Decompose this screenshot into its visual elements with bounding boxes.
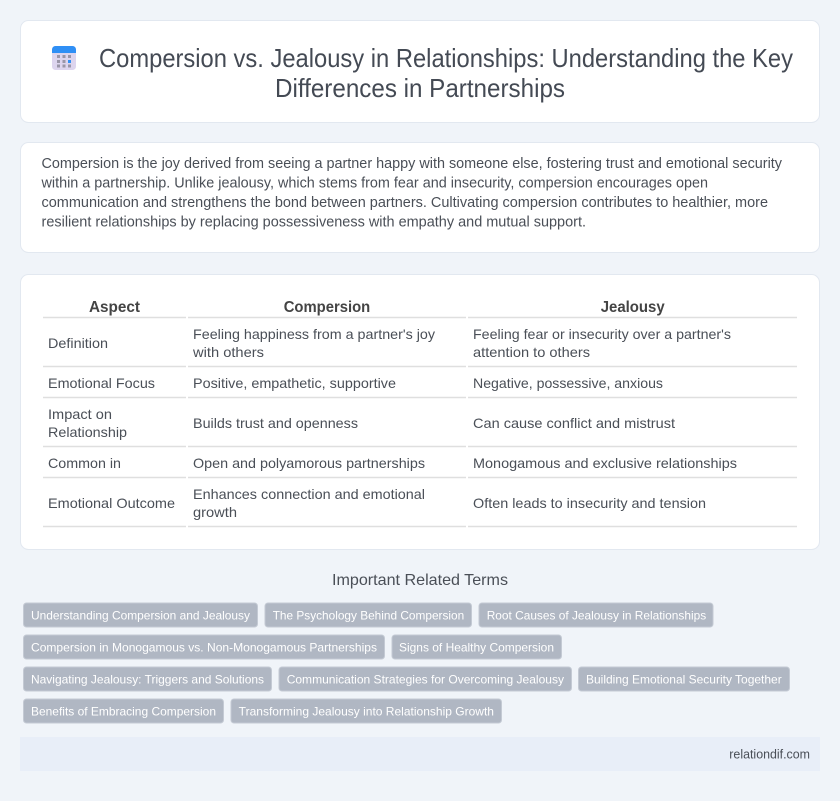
title: Compersion vs. Jealousy in Relationships: Understanding the Key — [99, 45, 793, 73]
row: definition: Feeling fear or insecurity over a partner's — [473, 326, 731, 342]
row: emotional focus: Emotional Focus — [48, 375, 155, 391]
panel: intro paragraph: Compersion is the joy derived from seeing a partner happy with someone else, fostering trust and emotional security — [42, 156, 783, 172]
row: emotional focus — [48, 375, 663, 391]
tags: related terms: Navigating Jealousy: Triggers and Solutions — [31, 672, 264, 686]
footer — [20, 737, 820, 771]
row: emotional outcome — [48, 486, 706, 520]
panel: intro paragraph: resilient relationships by replacing possessiveness with empathy and mutual support. — [42, 215, 586, 231]
tags: related terms: Benefits of Embracing Compersion — [31, 704, 216, 718]
tags: related terms: Transforming Jealousy into Relationship Growth — [239, 704, 494, 718]
row: impact on relationship: Can cause conflict and mistrust — [473, 415, 675, 431]
row: common in — [48, 455, 737, 471]
row: impact on relationship: Relationship — [48, 424, 127, 440]
tags: related terms: Communication Strategies for Overcoming Jealousy — [287, 672, 564, 686]
table header: Aspect — [89, 299, 141, 316]
tags: related terms: Understanding Compersion and Jealousy — [31, 608, 250, 622]
title — [99, 45, 793, 103]
row: emotional outcome: Enhances connection and emotional — [193, 486, 425, 502]
table header: Compersion — [284, 299, 370, 316]
tags: related terms: The Psychology Behind Compersion — [273, 608, 464, 622]
row: emotional outcome: Emotional Outcome — [48, 495, 175, 511]
row: emotional focus: Positive, empathetic, supportive — [193, 375, 396, 391]
panel: intro paragraph: within a partnership. Unlike jealousy, which stems from fear and insecurity, compersion encourages open — [41, 176, 708, 192]
tags: related terms: Building Emotional Security Together — [586, 672, 782, 686]
table header: Jealousy — [601, 299, 665, 316]
row: common in: Open and polyamorous partnerships — [193, 455, 425, 471]
row: impact on relationship — [48, 406, 675, 440]
title: Differences in Partnerships — [275, 75, 565, 103]
row: impact on relationship: Impact on — [48, 406, 112, 422]
row: common in: Monogamous and exclusive relationships — [473, 455, 737, 471]
panel: comparison table — [20, 274, 820, 550]
row: common in: Common in — [48, 455, 121, 471]
row: impact on relationship: Builds trust and openness — [193, 415, 358, 431]
panel: intro paragraph: communication and strengthens the bond between partners. Cultivating compersion contributes to healthier, more — [42, 195, 768, 211]
row: emotional outcome: Often leads to insecurity and tension — [473, 495, 706, 511]
header panel — [20, 20, 820, 122]
tags: related terms: Compersion in Monogamous vs. Non-Monogamous Partnerships — [31, 640, 377, 654]
row: emotional focus: Negative, possessive, anxious — [473, 375, 663, 391]
row: definition: Feeling happiness from a partner's joy — [193, 326, 435, 342]
icon: calendar — [52, 46, 76, 70]
tags: related terms — [24, 603, 790, 723]
tags: related terms: Signs of Healthy Compersion — [399, 640, 554, 654]
heading: important related terms: Important Related Terms — [332, 572, 508, 589]
panel: intro paragraph — [20, 142, 820, 252]
row: definition: with others — [192, 344, 264, 360]
table header — [89, 299, 665, 316]
row: definition — [48, 326, 731, 360]
footer: relationdif.com — [729, 746, 810, 761]
tags: related terms: Root Causes of Jealousy in Relationships — [487, 608, 706, 622]
row: definition: attention to others — [473, 344, 590, 360]
row: emotional outcome: growth — [193, 504, 237, 520]
row: definition: Definition — [48, 335, 108, 351]
